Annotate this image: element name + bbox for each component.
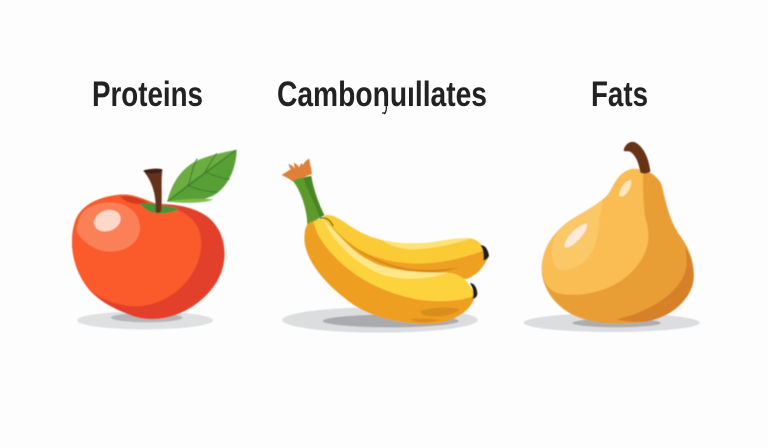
- apple dimple: [120, 196, 152, 204]
- back banana: [323, 215, 488, 279]
- front banana tip: [470, 283, 477, 298]
- front banana: [304, 219, 475, 324]
- icon: pear: [524, 142, 700, 332]
- front banana bruise: [410, 307, 460, 322]
- apple glare: [91, 206, 124, 235]
- apple lighter face: [72, 194, 201, 306]
- front banana highlight: [323, 220, 448, 279]
- banana shadow: [282, 307, 478, 333]
- heading: Proteins: Proteins: [92, 75, 203, 114]
- icon: bananas: [282, 159, 489, 333]
- apple highlight: [77, 202, 140, 252]
- pear light face: [542, 169, 648, 295]
- heading: Fats: Fats: [591, 75, 648, 114]
- pear dark crescent: [617, 247, 694, 322]
- back banana shading: [332, 228, 488, 279]
- pear highlight: [552, 201, 603, 270]
- back banana highlight: [380, 238, 470, 249]
- apple body: [72, 194, 225, 319]
- pear glare lower: [564, 223, 587, 247]
- back banana groove: [327, 219, 460, 272]
- banana stem: [293, 176, 324, 225]
- pear stem: [624, 142, 650, 174]
- apple stem: [143, 169, 162, 213]
- icon: apple: [72, 150, 237, 329]
- pear body: [542, 169, 694, 324]
- apple leaf: [167, 150, 237, 203]
- pear shadow: [524, 313, 700, 332]
- banana seam: [320, 218, 333, 226]
- apple shadow: [77, 311, 213, 329]
- banana crown: [282, 159, 312, 181]
- back banana tip: [481, 245, 489, 260]
- pear glare upper: [619, 180, 631, 197]
- apple calyx: [140, 203, 179, 214]
- front banana light face: [313, 219, 474, 301]
- heading: Cambonuullates: Cambonuıllates: [277, 75, 487, 114]
